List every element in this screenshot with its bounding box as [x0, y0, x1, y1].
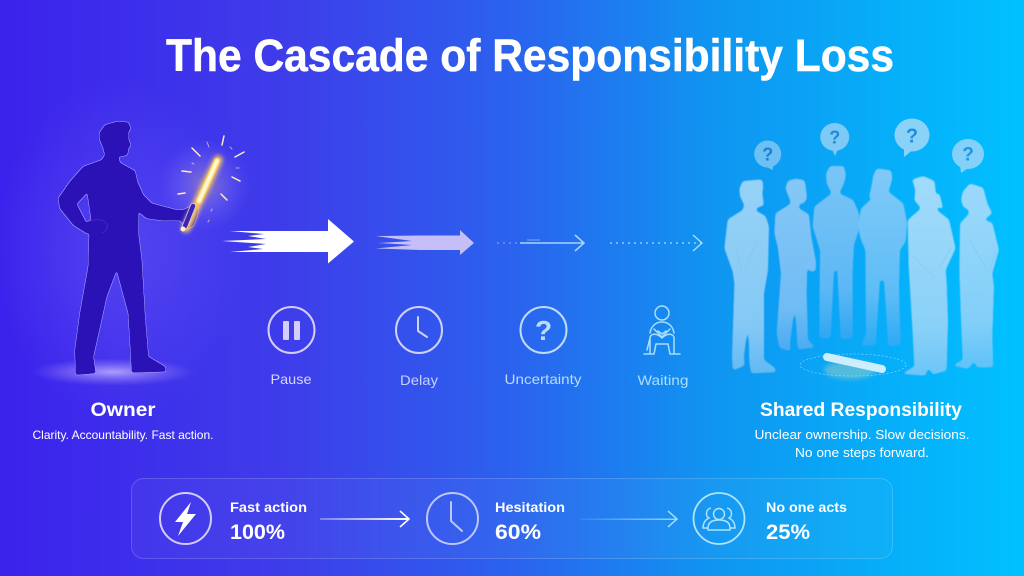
bubble 3: ?	[906, 126, 918, 148]
arrow: to hesitation	[320, 511, 409, 527]
title: The Cascade of Responsibility Loss	[166, 30, 894, 81]
metric: fast action	[160, 493, 307, 544]
sparks	[178, 136, 244, 200]
label: owner: Clarity. Accountability. Fast action.	[32, 428, 214, 442]
hand on hip	[87, 220, 107, 233]
step: uncertainty	[504, 307, 582, 387]
label: shared responsibility	[754, 400, 970, 460]
arrow: strong	[222, 219, 354, 264]
label: owner	[32, 400, 214, 442]
metric: hesitation: 60%	[495, 521, 541, 544]
panel: shared responsibility group	[724, 118, 999, 379]
metric: no one acts: 25%	[766, 521, 810, 544]
baton halo	[159, 139, 251, 231]
owner silhouette	[58, 122, 198, 375]
metric: fast action: Fast action	[230, 499, 307, 515]
bubble 4: ?	[962, 144, 974, 166]
person 2	[774, 179, 816, 351]
label: shared responsibility: Shared Responsibility	[760, 400, 962, 421]
bubble 1	[754, 140, 781, 170]
step: waiting	[638, 306, 688, 388]
icon: pause	[268, 307, 314, 353]
person 6	[952, 183, 999, 369]
person 4 (back)	[858, 168, 907, 347]
bubble 4	[952, 139, 984, 173]
panel: owner figure	[0, 80, 251, 420]
person 5	[901, 176, 956, 376]
step: pause	[268, 307, 314, 387]
bubble 3	[894, 118, 930, 157]
arrow: to no one acts	[580, 511, 677, 527]
icon: seated person	[644, 306, 680, 354]
step: waiting: Waiting	[638, 372, 688, 388]
icon: question: ?	[535, 315, 552, 346]
label: shared responsibility: Unclear ownership. Slow decisions.	[754, 428, 970, 442]
metric: hesitation: Hesitation	[495, 499, 565, 515]
icon: clock	[427, 493, 478, 544]
arrow: thin dashed	[497, 235, 584, 251]
icon: clock	[396, 307, 442, 353]
step: delay	[396, 307, 442, 388]
metric: fast action: 100%	[230, 521, 285, 544]
person 1	[724, 179, 776, 373]
person 3 (back)	[813, 166, 860, 339]
glowing baton	[180, 160, 218, 232]
label: owner: Owner	[90, 400, 156, 421]
icon: group	[694, 493, 744, 544]
label: shared responsibility: No one steps forward.	[795, 446, 929, 460]
small sparks	[192, 142, 239, 222]
arrow: fading	[376, 230, 474, 255]
metric: hesitation	[427, 493, 565, 544]
panel: progress summary	[132, 478, 892, 558]
arrow: dotted	[610, 235, 702, 251]
clasped arm details	[735, 240, 996, 278]
speech bubbles	[754, 118, 984, 173]
step: delay: Delay	[400, 372, 438, 388]
step: uncertainty: Uncertainty	[504, 371, 582, 387]
metric: no one acts: No one acts	[766, 499, 847, 515]
bubble 2: ?	[829, 128, 840, 148]
floor glow	[31, 358, 195, 386]
step: pause: Pause	[270, 371, 312, 387]
bubble 2	[820, 123, 849, 156]
icon: lightning	[160, 493, 211, 544]
bubble 1: ?	[762, 144, 773, 164]
metric: no one acts	[694, 493, 847, 544]
dropped baton	[800, 354, 906, 379]
